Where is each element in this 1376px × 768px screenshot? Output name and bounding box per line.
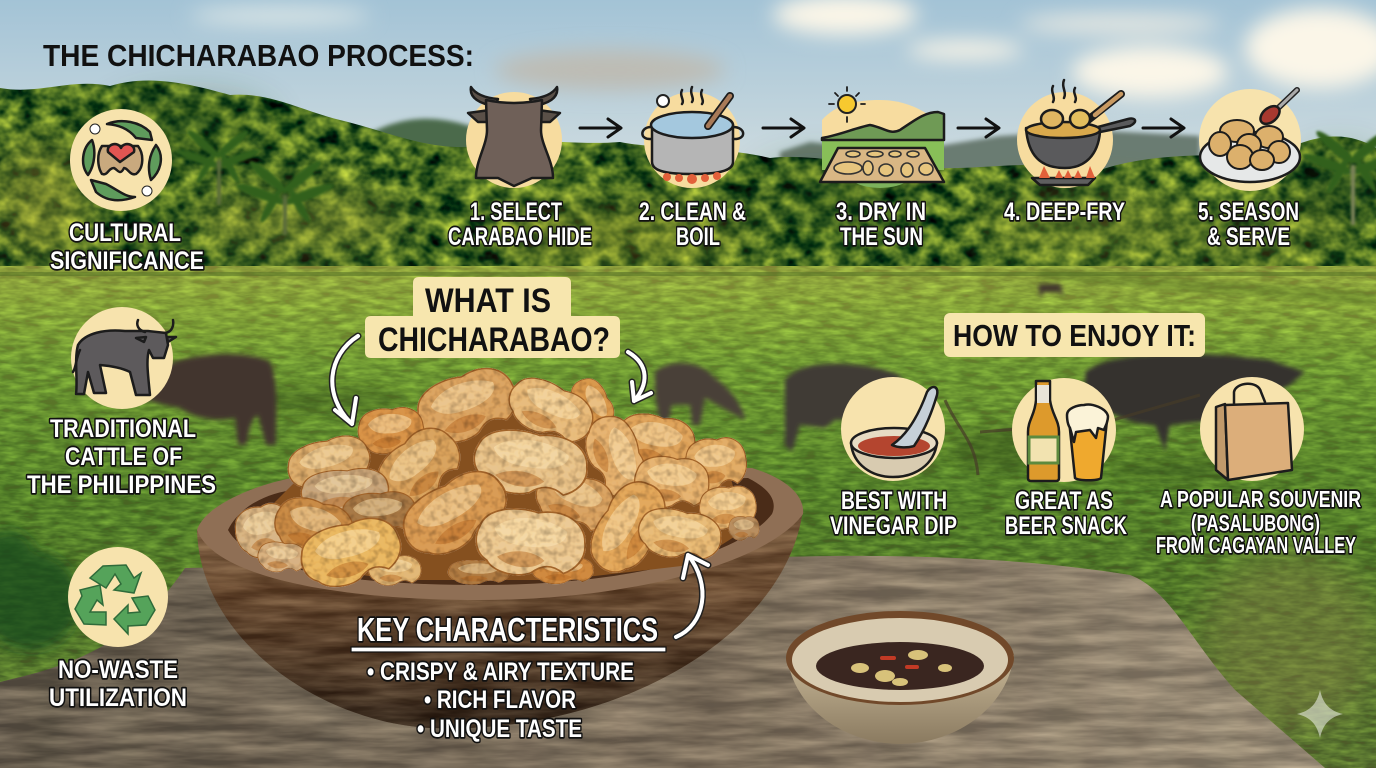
label: traditional cattle <box>27 415 216 499</box>
step 4: deep fry <box>1017 80 1135 188</box>
heading: what is chicharabao <box>365 277 620 359</box>
panel: key characteristics: • UNIQUE TASTE <box>417 715 582 743</box>
sunlit foliage glow <box>0 100 1376 265</box>
label: no-waste utilization: NO-WASTE <box>58 656 178 684</box>
heading: what is chicharabao: WHAT IS <box>425 282 551 320</box>
label: traditional cattle: TRADITIONAL <box>50 415 196 443</box>
panel: key characteristics: • RICH FLAVOR <box>424 686 576 714</box>
sparkle watermark <box>1297 690 1343 738</box>
step 5 label <box>1198 198 1299 251</box>
label: traditional cattle: CATTLE OF <box>65 443 182 471</box>
step 2 label: 2. CLEAN & <box>639 198 746 226</box>
arrow: what is to chicharon left <box>332 336 358 424</box>
arrow <box>958 119 999 137</box>
step 3 label: THE SUN <box>840 223 923 251</box>
palm trees <box>175 128 1376 235</box>
arrow <box>1143 119 1184 137</box>
chicharon bowl <box>197 359 803 728</box>
panel: key characteristics: • CRISPY & AIRY TEXTURE <box>367 658 634 686</box>
label: traditional cattle: THE PHILIPPINES <box>27 471 216 499</box>
step 1 label <box>448 198 592 251</box>
label: souvenir: (PASALUBONG) <box>1191 510 1320 536</box>
step 5 label: & SERVE <box>1207 223 1290 251</box>
label: souvenir <box>1156 486 1361 558</box>
step 5: season and serve <box>1199 89 1301 191</box>
label: no-waste utilization <box>49 656 187 712</box>
panel: key characteristics: KEY CHARACTERISTICS <box>357 611 658 648</box>
arrow: what is to chicharon right <box>628 352 651 401</box>
label: cultural significance: CULTURAL <box>69 219 181 247</box>
label: vinegar dip <box>830 487 957 540</box>
arrow <box>580 119 621 137</box>
icon: cultural cycle <box>70 109 172 211</box>
step 1 label: 1. SELECT <box>470 198 562 226</box>
bowl body <box>197 468 803 728</box>
icon: souvenir bag <box>1200 377 1304 481</box>
step 2 label <box>639 198 746 251</box>
dipping sauce bowl <box>786 611 1014 744</box>
step 3 label <box>836 198 926 251</box>
panel: left significance column <box>27 109 216 712</box>
icon: carabao <box>71 307 176 409</box>
label: cultural significance: SIGNIFICANCE <box>50 247 204 275</box>
wooden table <box>0 556 1325 768</box>
crispy chicharon pile <box>230 359 759 595</box>
label: cultural significance <box>50 219 204 275</box>
label: beer snack <box>1005 487 1127 540</box>
bowl rim <box>197 468 803 600</box>
panel: process steps <box>448 80 1301 251</box>
label: no-waste utilization: UTILIZATION <box>49 684 187 712</box>
icon: vinegar dip <box>841 377 945 481</box>
bowl interior <box>228 478 774 585</box>
title: THE CHICHARABAO PROCESS: <box>43 38 474 73</box>
icon: beer <box>1012 378 1116 482</box>
step 2 label: BOIL <box>676 223 720 251</box>
step 1: carabao hide <box>466 87 562 188</box>
heading: what is chicharabao: CHICHARABAO? <box>378 321 610 359</box>
label: vinegar dip: VINEGAR DIP <box>830 512 957 540</box>
icon: recycle <box>68 547 168 647</box>
step 4 label: 4. DEEP-FRY <box>1004 198 1125 226</box>
step 3: sun drying <box>820 87 944 188</box>
label: beer snack: GREAT AS <box>1015 487 1113 515</box>
arrow: key characteristics to chicharon <box>676 555 708 637</box>
arrow <box>763 119 804 137</box>
label: vinegar dip: BEST WITH <box>841 487 947 515</box>
panel: key characteristics <box>351 611 666 743</box>
panel: how to enjoy <box>830 377 1361 558</box>
step 3 label: 3. DRY IN <box>836 198 926 226</box>
step 1 label: CARABAO HIDE <box>448 223 592 251</box>
label: beer snack: BEER SNACK <box>1005 512 1127 540</box>
step 5 label: 5. SEASON <box>1198 198 1299 226</box>
step 2: boiling pot <box>642 87 743 188</box>
heading: how to enjoy it: HOW TO ENJOY IT: <box>953 318 1196 353</box>
